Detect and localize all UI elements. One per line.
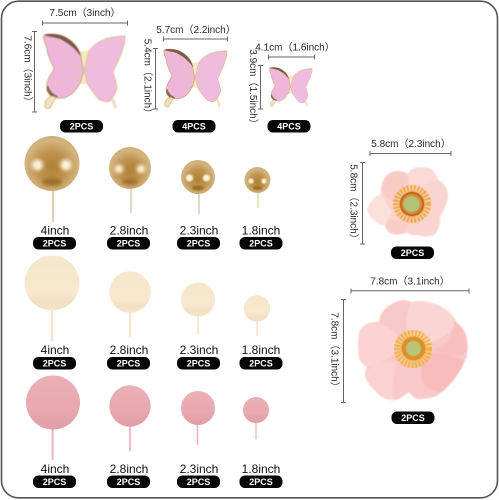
quantity badge: 4PCS xyxy=(182,122,206,132)
pink labels: 1.8inch xyxy=(242,462,280,476)
pink labels: 2.8inch xyxy=(110,462,148,476)
cream labels: 2.8inch xyxy=(110,343,148,357)
cream ball 2.8inch xyxy=(109,271,151,337)
gold labels: 1.8inch xyxy=(242,224,280,238)
gold ball 4inch xyxy=(24,136,80,222)
cream labels: 2PCS xyxy=(43,358,66,368)
large flower group xyxy=(328,276,469,424)
height dimension: 5.4cm（2.1inch） xyxy=(142,39,154,118)
gold ball 2.3inch xyxy=(181,160,215,214)
small flower group xyxy=(348,138,451,259)
height dimension xyxy=(328,300,346,402)
pink labels: 4inch xyxy=(41,462,69,476)
butterfly image xyxy=(164,49,227,108)
pink labels: 2PCS xyxy=(43,477,66,487)
pink labels: 2PCS xyxy=(117,477,140,487)
cream labels: 1.8inch xyxy=(242,343,280,357)
height dimension: 3.9cm（1.5inch） xyxy=(247,49,259,129)
pink labels: 2PCS xyxy=(187,477,210,487)
width dimension: 5.8cm（2.3inch） xyxy=(371,138,451,150)
gold labels: 4inch xyxy=(41,224,69,238)
quantity badge: 2PCS xyxy=(401,248,424,258)
gold ball 1.8inch xyxy=(244,167,270,208)
butterfly group: medium xyxy=(142,24,236,132)
quantity badge: 2PCS xyxy=(401,413,425,423)
gold labels: 2.8inch xyxy=(110,224,148,238)
pink ball 1.8inch xyxy=(243,397,269,439)
pink labels: 2PCS xyxy=(249,477,273,487)
butterfly group: large xyxy=(22,7,128,132)
cream labels: 4inch xyxy=(41,343,69,357)
cream ball 1.8inch xyxy=(244,295,270,336)
pink balls row xyxy=(26,376,282,488)
width dimension: 7.8cm（3.1inch） xyxy=(370,276,450,288)
butterfly image xyxy=(269,67,312,107)
large flower xyxy=(358,300,468,400)
height dimension: 5.8cm（2.3inch） xyxy=(348,164,360,244)
gold balls row xyxy=(24,136,282,250)
pink labels: 2.3inch xyxy=(180,462,218,476)
stamens xyxy=(398,334,428,364)
gold ball 2.8inch xyxy=(109,147,151,213)
cream labels: 2PCS xyxy=(249,358,273,368)
pink ball 4inch xyxy=(26,376,80,460)
width dimension xyxy=(351,276,469,294)
pink ball 2.3inch xyxy=(181,391,215,445)
width dimension: 5.7cm（2.2inch） xyxy=(156,24,236,36)
cream ball 4inch xyxy=(24,256,80,341)
pink ball 2.8inch xyxy=(109,385,151,451)
width dimension: 7.5cm（3inch） xyxy=(49,7,121,19)
quantity badge: 2PCS xyxy=(70,122,93,132)
cream ball 2.3inch xyxy=(181,282,215,335)
pink labels xyxy=(33,462,282,488)
gold labels xyxy=(33,224,282,250)
height dimension: 7.8cm（3.1inch） xyxy=(328,312,340,392)
cream balls row xyxy=(24,256,282,370)
gold labels: 2PCS xyxy=(187,238,210,248)
cream labels: 2PCS xyxy=(187,358,210,368)
height dimension: 7.6cm（3inch） xyxy=(22,35,34,107)
quantity badge xyxy=(392,412,434,424)
butterfly image xyxy=(44,34,125,110)
quantity badge: 4PCS xyxy=(277,122,301,132)
cream labels: 2PCS xyxy=(117,358,140,368)
small flower xyxy=(368,167,448,236)
width dimension: 4.1cm（1.6inch） xyxy=(255,42,335,54)
cream labels xyxy=(33,343,282,370)
gold labels: 2PCS xyxy=(117,238,140,248)
cream labels: 2.3inch xyxy=(180,343,218,357)
butterfly group: small xyxy=(247,42,335,132)
gold labels: 2PCS xyxy=(249,238,273,248)
gold labels: 2PCS xyxy=(43,238,66,248)
gold labels: 2.3inch xyxy=(180,224,218,238)
stamens xyxy=(396,188,428,220)
